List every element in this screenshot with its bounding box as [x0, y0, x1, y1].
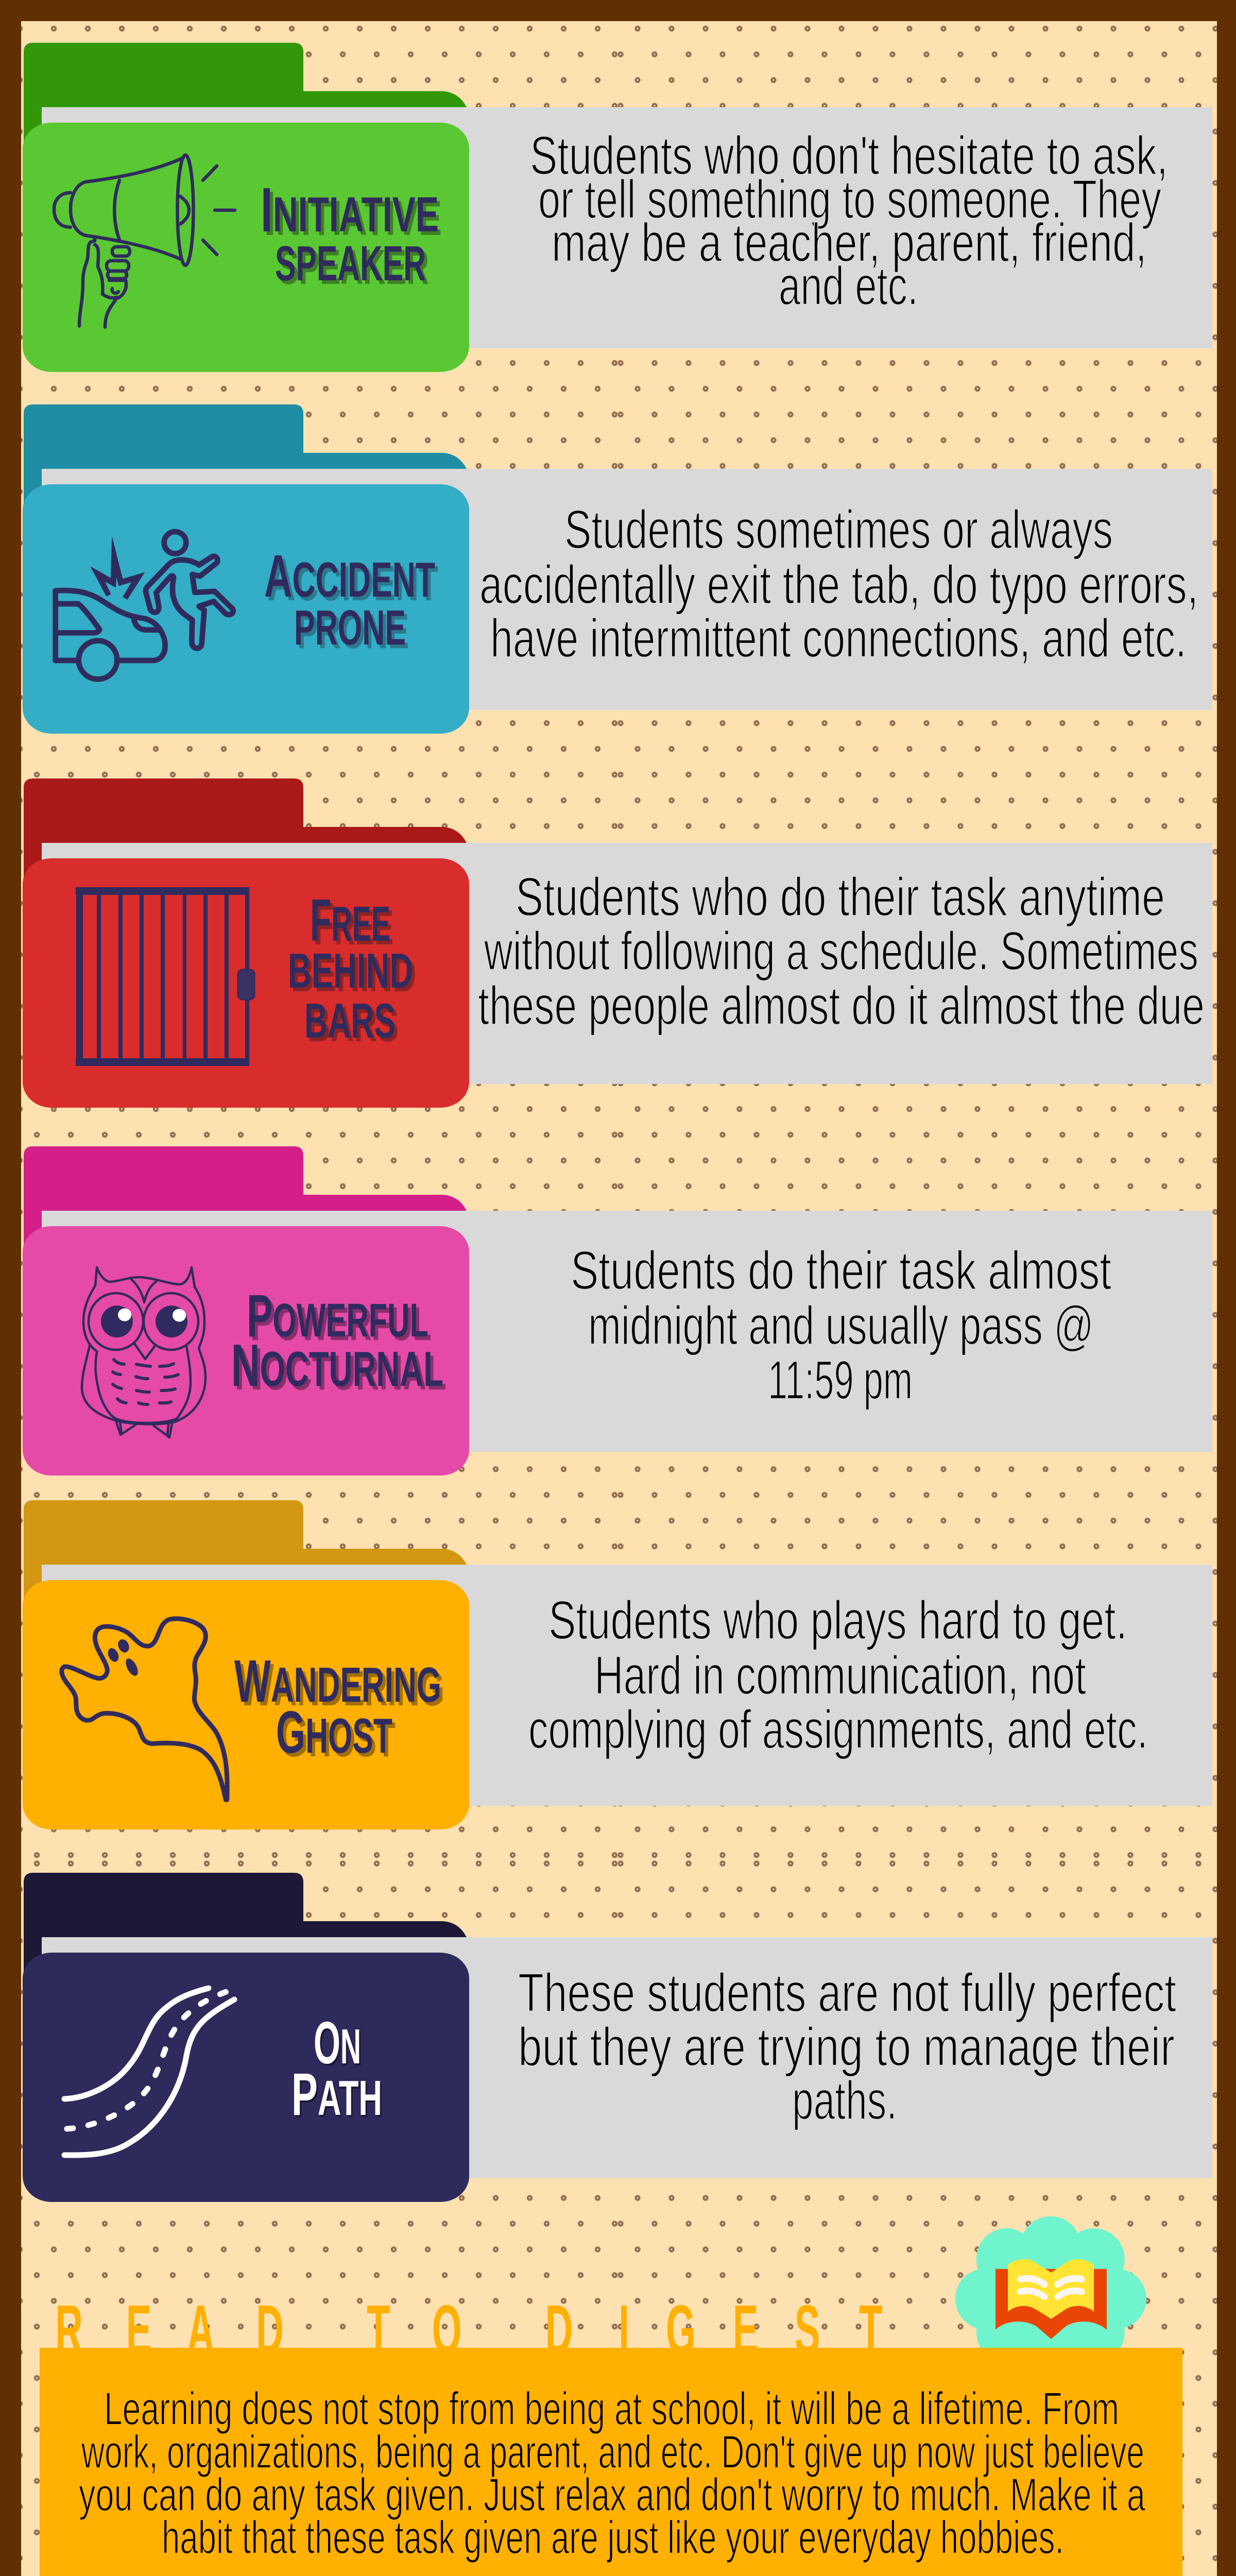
description card	[42, 1937, 1212, 2178]
description text: paths.	[792, 2070, 897, 2131]
icon: ghost	[62, 1619, 227, 1800]
description text: and etc.	[779, 256, 918, 316]
label: free behind bars: BARS	[304, 993, 396, 1048]
label: powerful nocturnal: NOCTURNAL	[231, 1332, 443, 1399]
panel: read to digest text box	[40, 2348, 1182, 2576]
icon: jail bars	[76, 887, 254, 1066]
icon: book on mint cloud	[955, 2216, 1146, 2363]
label: free behind bars: FREE	[310, 887, 390, 954]
icon: winding road	[64, 1988, 234, 2155]
label: free behind bars: BEHIND	[288, 943, 413, 998]
folder back	[24, 43, 467, 155]
description card	[42, 1211, 1212, 1452]
label: on path: ON	[314, 2009, 361, 2076]
description card	[42, 469, 1212, 710]
description card	[42, 107, 1212, 348]
label: initiative speaker: INITIATIVE	[261, 175, 439, 245]
icon: car crash	[56, 532, 233, 679]
label: accident prone: ACCIDENT	[264, 543, 435, 609]
panel: initiative speaker	[23, 43, 1212, 372]
label: accident prone: PRONE	[294, 600, 406, 655]
label: accident prone	[264, 543, 435, 655]
icon: owl	[82, 1267, 205, 1437]
folder back	[24, 1500, 467, 1612]
label: wandering ghost: GHOST	[276, 1699, 392, 1766]
label: wandering ghost: WANDERING	[234, 1648, 441, 1715]
label: on path	[291, 2009, 382, 2128]
folder front	[23, 1953, 469, 2202]
folder front	[23, 123, 469, 372]
folder front	[23, 1580, 469, 1829]
body text	[79, 2383, 1146, 2564]
label: on path: PATH	[291, 2061, 382, 2128]
description text	[528, 1590, 1148, 1760]
description text	[518, 1962, 1176, 2131]
folder front	[23, 858, 469, 1108]
description text	[479, 499, 1198, 669]
description text: 11:59 pm	[768, 1350, 913, 1411]
panel: powerful nocturnal	[23, 1146, 1212, 1476]
folder back	[24, 1146, 467, 1258]
folder front	[23, 484, 469, 734]
panel: wandering ghost	[23, 1500, 1212, 1829]
label: powerful nocturnal: POWERFUL	[247, 1282, 428, 1349]
description card	[42, 1565, 1212, 1806]
label: initiative speaker	[261, 175, 439, 291]
description text	[478, 867, 1205, 1036]
folder back	[24, 1873, 467, 1985]
heading: read to digest: READTODIGEST	[55, 2291, 883, 2369]
label: initiative speaker: SPEAKER	[275, 236, 426, 291]
label: wandering ghost	[234, 1648, 441, 1766]
description card	[42, 843, 1212, 1084]
panel: on path	[23, 1873, 1212, 2202]
label: free behind bars	[288, 887, 413, 1048]
icon: megaphone	[54, 155, 235, 327]
folder back	[24, 404, 467, 516]
panel: accident prone	[23, 404, 1212, 734]
label: powerful nocturnal	[231, 1282, 443, 1399]
description text	[571, 1240, 1111, 1411]
panel: free behind bars	[23, 778, 1212, 1108]
folder back	[24, 778, 467, 890]
description text	[530, 125, 1168, 316]
folder front	[23, 1226, 469, 1476]
